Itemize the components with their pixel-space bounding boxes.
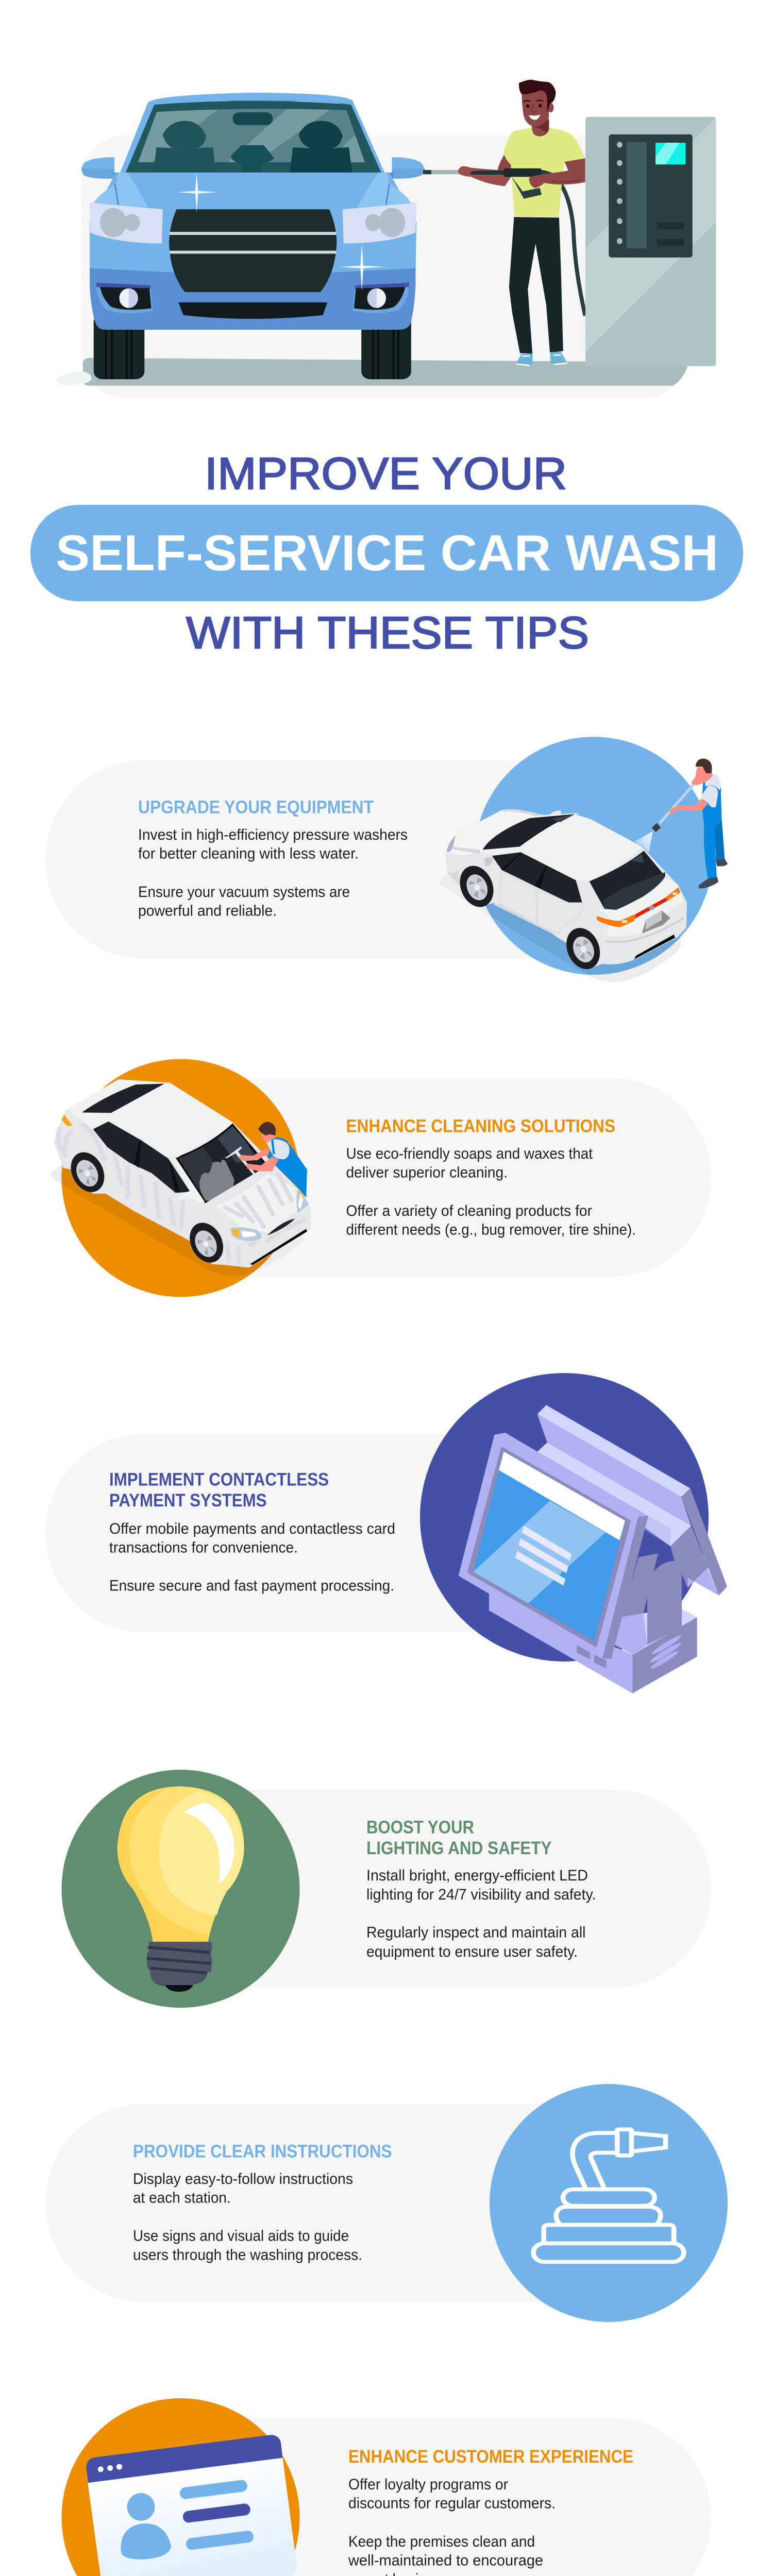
panel: boost your lighting and safety: [62, 1770, 711, 2008]
title: WITH THESE TIPS: [186, 608, 589, 658]
body text: [133, 2171, 362, 2264]
body text: [346, 1145, 636, 1239]
body text: [366, 1867, 596, 1960]
icon: light bulb: [62, 1770, 300, 2008]
hero car: [57, 93, 687, 386]
heading: ENHANCE CLEANING SOLUTIONS: [346, 1116, 615, 1137]
body text: users through the washing process.: [133, 2246, 362, 2264]
body text: Ensure your vacuum systems are: [138, 884, 350, 901]
icon: coiled hose: [490, 2084, 728, 2322]
body text: Offer mobile payments and contactless card: [109, 1520, 395, 1537]
heading: PAYMENT SYSTEMS: [109, 1490, 267, 1511]
heading: IMPLEMENT CONTACTLESS: [109, 1469, 329, 1489]
title: IMPROVE YOUR: [205, 449, 567, 499]
icon: profile card: [62, 2398, 300, 2576]
body text: equipment to ensure user safety.: [366, 1943, 578, 1960]
hero illustration: car, man and kiosk: [57, 80, 716, 398]
pressure wand: [423, 170, 431, 174]
heading: [109, 1469, 329, 1511]
body text: [109, 1520, 395, 1595]
body text: for better cleaning with less water.: [138, 845, 359, 862]
panel: enhance cleaning solutions: [51, 1059, 711, 1297]
heading: BOOST YOUR: [366, 1817, 474, 1837]
heading: LIGHTING AND SAFETY: [366, 1838, 551, 1858]
body text: Offer loyalty programs or: [348, 2476, 508, 2493]
heading: PROVIDE CLEAR INSTRUCTIONS: [133, 2141, 392, 2162]
body text: discounts for regular customers.: [348, 2495, 556, 2512]
body text: Use eco-friendly soaps and waxes that: [346, 1145, 593, 1162]
body text: different needs (e.g., bug remover, tire shine).: [346, 1222, 636, 1239]
body text: Install bright, energy-efficient LED: [366, 1867, 588, 1884]
body text: Use signs and visual aids to guide: [133, 2228, 349, 2245]
illustration: payment terminal: [420, 1373, 727, 1693]
body text: Display easy-to-follow instructions: [133, 2171, 353, 2188]
body text: Offer a variety of cleaning products for: [346, 1202, 592, 1219]
illustration: white car being pressure washed: [441, 737, 728, 982]
body text: transactions for convenience.: [109, 1539, 298, 1556]
panel: provide clear instructions: [45, 2084, 728, 2322]
heading: ENHANCE CUSTOMER EXPERIENCE: [348, 2447, 633, 2467]
title pill: [30, 505, 743, 601]
illustration: foamy car with squeegee: [51, 1059, 311, 1297]
body text: Invest in high-efficiency pressure washers: [138, 826, 408, 843]
body text: well-maintained to encourage: [348, 2552, 543, 2569]
title: SELF-SERVICE CAR WASH: [56, 524, 718, 581]
title: [30, 449, 743, 658]
body text: Regularly inspect and maintain all: [366, 1924, 585, 1941]
man and kiosk: [458, 80, 716, 366]
heading: [366, 1817, 551, 1858]
body text: [138, 826, 408, 919]
panel: implement contactless payment systems: [45, 1373, 727, 1693]
panel: enhance customer experience: [62, 2398, 711, 2576]
body text: lighting for 24/7 visibility and safety.: [366, 1886, 596, 1903]
body text: Ensure secure and fast payment processing.: [109, 1578, 394, 1595]
body text: deliver superior cleaning.: [346, 1164, 508, 1181]
heading: UPGRADE YOUR EQUIPMENT: [138, 798, 374, 818]
panel: upgrade your equipment: [45, 737, 728, 982]
body text: at each station.: [133, 2190, 231, 2206]
body text: Keep the premises clean and: [348, 2533, 535, 2550]
hero background panel: [81, 135, 687, 398]
body text: [348, 2476, 556, 2576]
body text: powerful and reliable.: [138, 903, 277, 919]
